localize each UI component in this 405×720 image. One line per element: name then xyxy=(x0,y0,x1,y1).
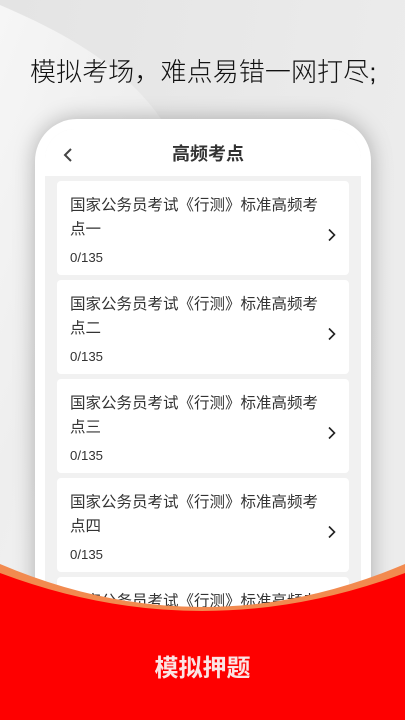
card 2: 0/135 xyxy=(70,349,103,364)
card 1 xyxy=(57,181,349,275)
card 4: 国家公务员考试《行测》标准高频考点四 xyxy=(70,494,318,534)
card 1: 0/135 xyxy=(70,250,103,265)
app header xyxy=(45,129,361,176)
card 4 xyxy=(57,478,349,572)
footer label: 模拟押题 xyxy=(154,655,250,682)
phone screen xyxy=(45,129,361,720)
page heading: 高频考点 xyxy=(172,144,244,164)
card 3 xyxy=(57,379,349,473)
title: 模拟考场，难点易错一网打尽; xyxy=(30,57,377,87)
card 2 xyxy=(57,280,349,374)
card 5 xyxy=(57,577,349,671)
phone frame xyxy=(35,119,371,720)
card 1: 国家公务员考试《行测》标准高频考点一 xyxy=(70,196,318,238)
icon: back arrow xyxy=(64,148,72,162)
card 4: 0/135 xyxy=(70,547,103,562)
card 5: 国家公务员考试《行测》标准高频考点五 xyxy=(70,592,318,634)
card 2: 国家公务员考试《行测》标准高频考点二 xyxy=(70,296,318,336)
card 3: 国家公务员考试《行测》标准高频考点三 xyxy=(70,394,318,436)
card 3: 0/135 xyxy=(70,448,103,463)
